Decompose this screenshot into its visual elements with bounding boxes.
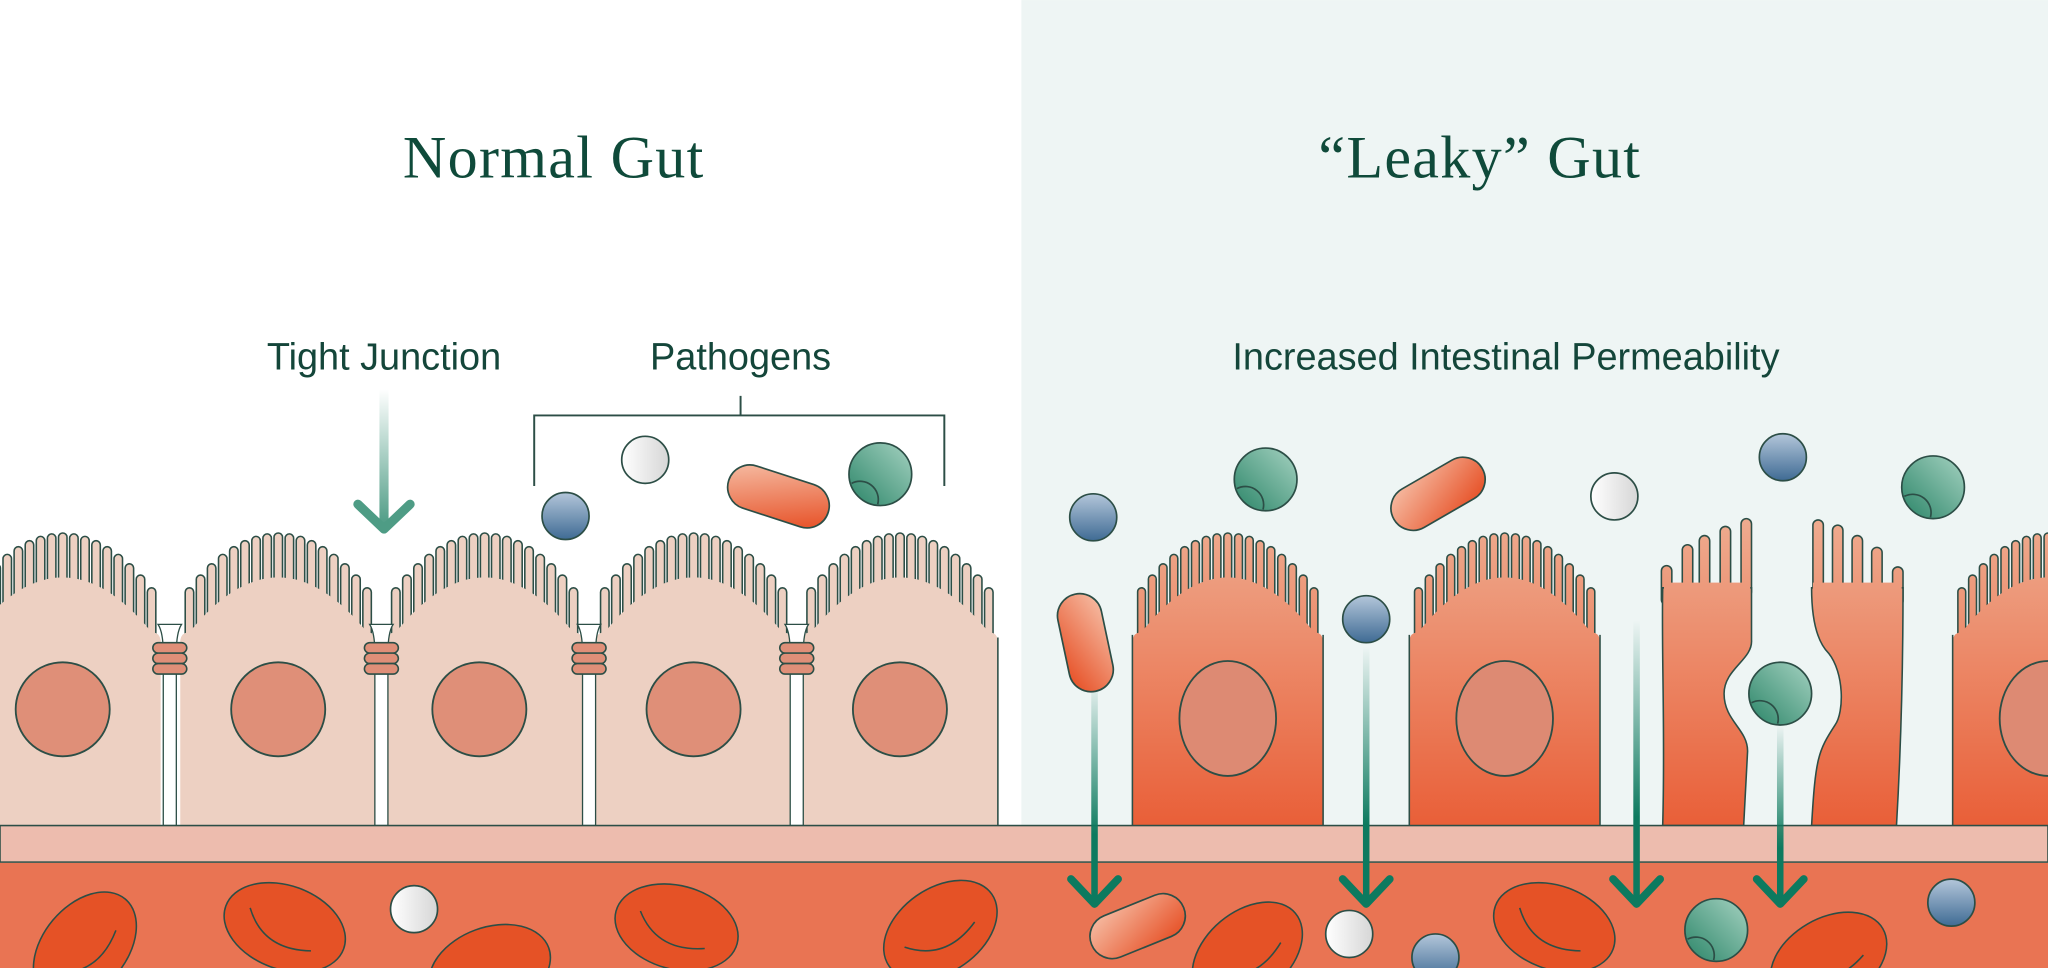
label: Pathogens: Pathogens xyxy=(650,337,831,379)
title: Leaky Gut: “Leaky” Gut xyxy=(1318,124,1641,191)
gaps between cells xyxy=(158,624,808,826)
arrows: leakage xyxy=(1071,620,1804,904)
label: Tight Junction: Tight Junction xyxy=(267,337,501,379)
leaky epithelial cells xyxy=(1132,519,2048,826)
blood vessel xyxy=(0,863,2048,968)
background: normal side xyxy=(0,0,1021,968)
label: Increased Intestinal Permeability: Increased Intestinal Permeability xyxy=(1232,337,1780,379)
bracket: pathogens xyxy=(534,396,944,486)
normal epithelial cells xyxy=(0,533,998,826)
red blood cells xyxy=(13,860,1904,968)
broken cell left xyxy=(1661,519,1752,826)
nuclei xyxy=(16,662,947,756)
tight junctions xyxy=(153,643,814,674)
arrow: tight junction xyxy=(358,389,410,529)
broken cell right xyxy=(1812,520,1903,826)
nuclei xyxy=(1179,661,2048,776)
pathogens xyxy=(391,434,1975,968)
basement membrane xyxy=(0,826,2048,862)
background: leaky side xyxy=(1021,0,2048,826)
title: Normal Gut: Normal Gut xyxy=(403,124,705,191)
